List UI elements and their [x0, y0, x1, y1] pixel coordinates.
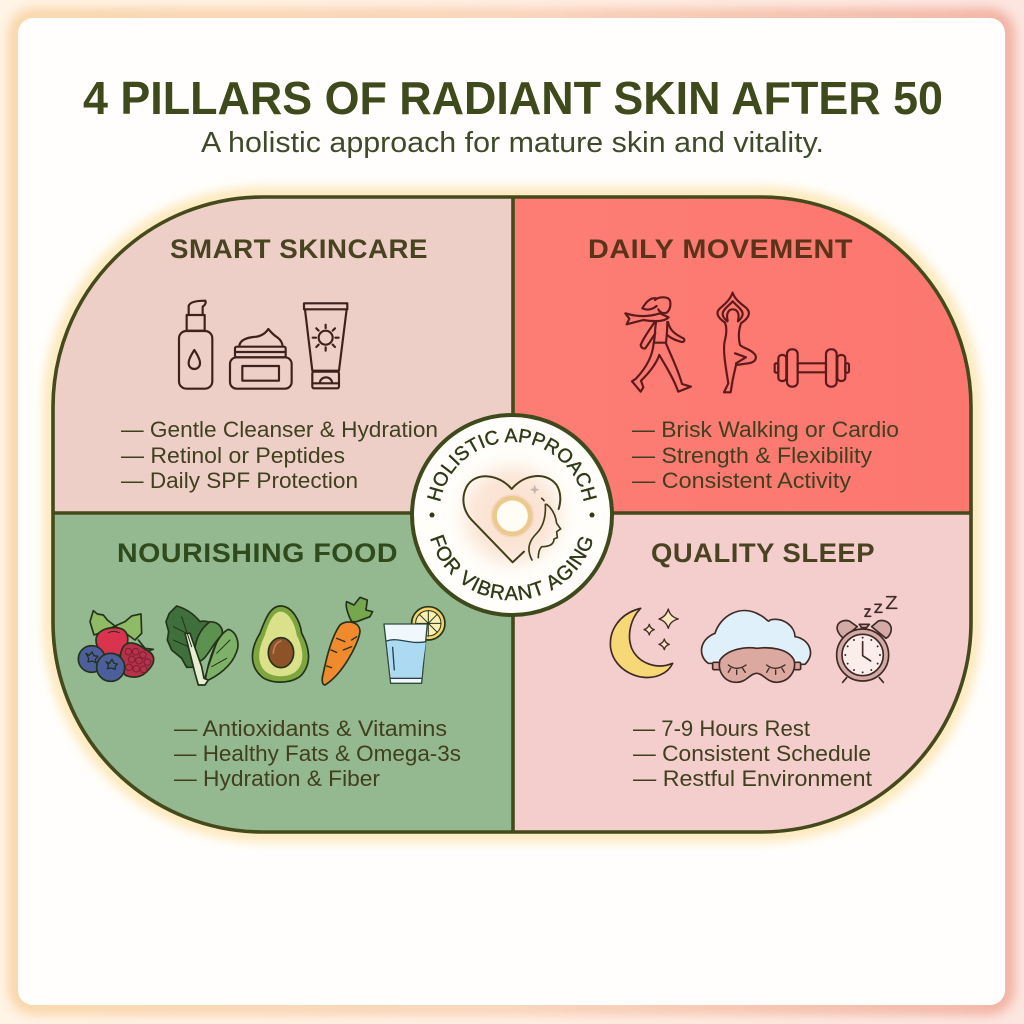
- checklist: [633, 716, 872, 791]
- subtitle: A holistic approach for mature skin and vitality.: [201, 127, 824, 159]
- center badge: holistic approach: [410, 413, 614, 617]
- pillar: quality sleep: [610, 538, 897, 791]
- checklist: — Gentle Cleanser & Hydration: [121, 417, 438, 442]
- checklist: [632, 417, 899, 493]
- badge side dots: [430, 512, 594, 518]
- pillar: smart skincare: [121, 234, 438, 493]
- icons: walker, yoga pose, dumbbell: [625, 293, 849, 392]
- heading: NOURISHING FOOD: [117, 538, 398, 568]
- checklist: — 7-9 Hours Rest: [633, 716, 810, 741]
- checklist: — Consistent Activity: [632, 468, 851, 493]
- badge top curved text: HOLISTIC APPROACH: [427, 428, 597, 502]
- checklist: — Hydration & Fiber: [174, 766, 380, 791]
- checklist: — Healthy Fats & Omega-3s: [174, 741, 461, 766]
- checklist: — Strength & Flexibility: [632, 443, 872, 468]
- heading: QUALITY SLEEP: [651, 538, 875, 568]
- checklist: — Retinol or Peptides: [121, 443, 345, 468]
- checklist: [121, 417, 438, 493]
- checklist: — Daily SPF Protection: [121, 468, 358, 493]
- badge bottom curved text: FOR VIBRANT AGING: [430, 534, 592, 600]
- panel glow: [50, 194, 974, 835]
- panel outline and dividers: [53, 197, 971, 832]
- pillar: nourishing food: [78, 538, 461, 791]
- heading: SMART SKINCARE: [170, 234, 428, 264]
- checklist: — Restful Environment: [633, 766, 872, 791]
- icons: berries, leafy greens, avocado, carrot, water glass: [78, 597, 445, 685]
- checklist: — Consistent Schedule: [633, 741, 871, 766]
- icons: crescent moon and stars, cloud with sleep mask, alarm clock: [610, 597, 897, 682]
- pillar: daily movement: [588, 234, 899, 493]
- checklist: — Brisk Walking or Cardio: [632, 417, 899, 442]
- quadrant: daily movement background: [513, 197, 971, 513]
- icon: heart with face profile and glowing ring: [463, 476, 561, 562]
- quadrant: quality sleep background: [513, 513, 971, 832]
- checklist: [174, 716, 461, 791]
- checklist: — Antioxidants & Vitamins: [174, 716, 447, 741]
- badge glow: [464, 467, 560, 563]
- icons: pump bottle, cream jar, sunscreen tube: [179, 301, 347, 389]
- quadrant: smart skincare background: [53, 197, 513, 513]
- heading: DAILY MOVEMENT: [588, 234, 853, 264]
- four pillars panel: [53, 197, 971, 832]
- quadrant: nourishing food background: [53, 513, 513, 832]
- title: 4 PILLARS OF RADIANT SKIN AFTER 50: [83, 72, 943, 124]
